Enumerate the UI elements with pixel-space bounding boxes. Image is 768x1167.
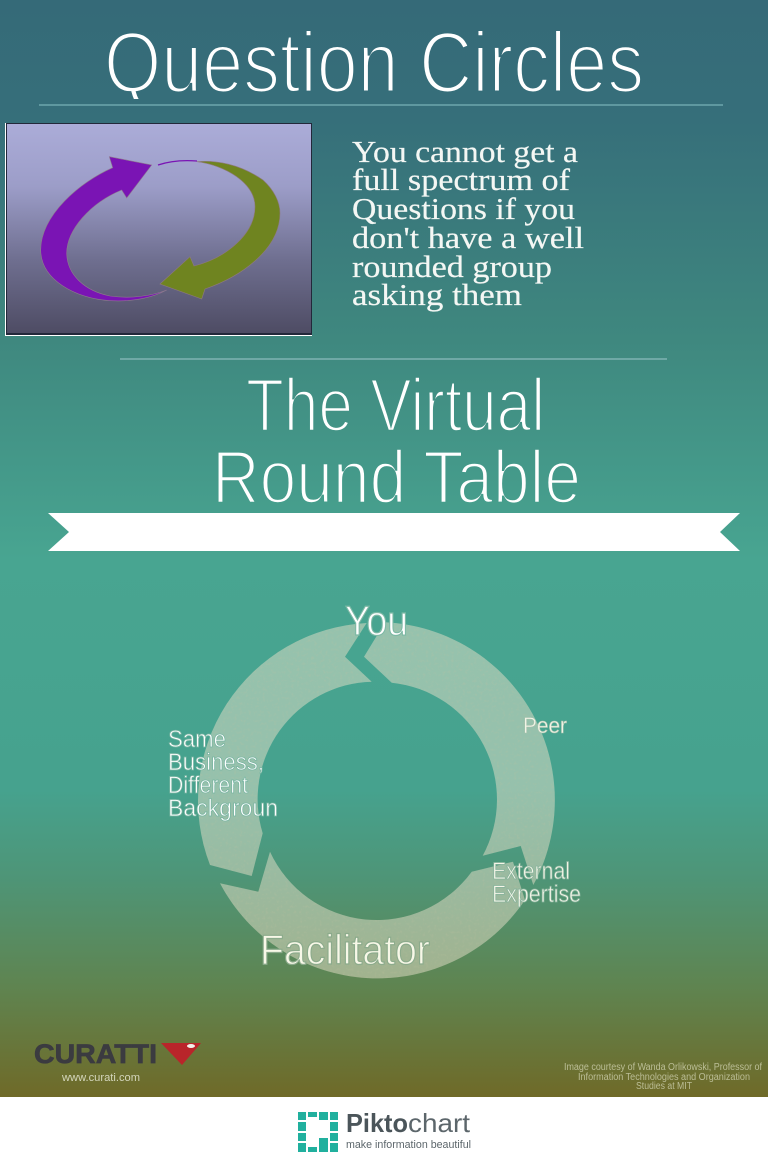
ring segment: bottom arrow [220,852,525,978]
footer strip [0,1097,768,1167]
logo: Piktochart: chart [408,1108,471,1138]
ring segment: left arrow [198,623,372,876]
intro text block: asking them [352,277,522,312]
logo: Piktochart [298,1108,471,1152]
label: Same Business, Different Background: Same [168,726,226,753]
intro text block [352,134,584,312]
heading: The Virtual Round Table [212,363,581,519]
logo: Curatti [34,1039,201,1084]
cycle diagram: three-part ring [198,622,555,978]
picture: circular arrows [5,123,312,336]
intro text block: full spectrum of [352,162,571,197]
label: Same Business, Different Background: Business, [168,749,264,776]
title: Question Circles: Question Circles [104,15,644,111]
ribbon banner [48,513,740,551]
logo: Piktochart: Pikto [346,1108,408,1138]
logo: Curatti: www.curati.com [61,1072,140,1084]
label: Same Business, Different Background: Different [168,772,248,799]
icon: Piktochart mosaic [298,1112,338,1152]
intro text block: Questions if you [352,191,575,226]
label: You: You [345,597,408,644]
label: Same Business, Different Background: Backgroun [168,795,278,822]
heading: The Virtual Round Table: The Virtual [246,363,545,447]
intro text block: You cannot get a [352,134,578,169]
ring segment: right arrow [364,622,555,885]
intro text block: don't have a well [352,220,584,255]
image credit [564,1062,762,1092]
logo: Piktochart: make information beautiful [346,1139,471,1151]
label: Peer: Peer [523,713,567,738]
label: External Expertise: Expertise [492,881,581,908]
label: Same Business, Different Background [168,726,278,822]
heading: The Virtual Round Table: Round Table [212,435,581,519]
label: Facilitator: Facilitator [260,926,430,973]
icon: purple arrow tail [158,161,197,165]
image credit: Studies at MIT [636,1081,692,1092]
intro text block: rounded group [352,249,552,284]
logo: Curatti: CURATTI [34,1039,157,1069]
label: External Expertise: External [492,858,570,885]
icon: green arrow [160,161,280,299]
image credit: Information Technologies and Organization [578,1072,750,1083]
icon: purple arrow [41,157,167,301]
label: External Expertise [492,858,581,908]
